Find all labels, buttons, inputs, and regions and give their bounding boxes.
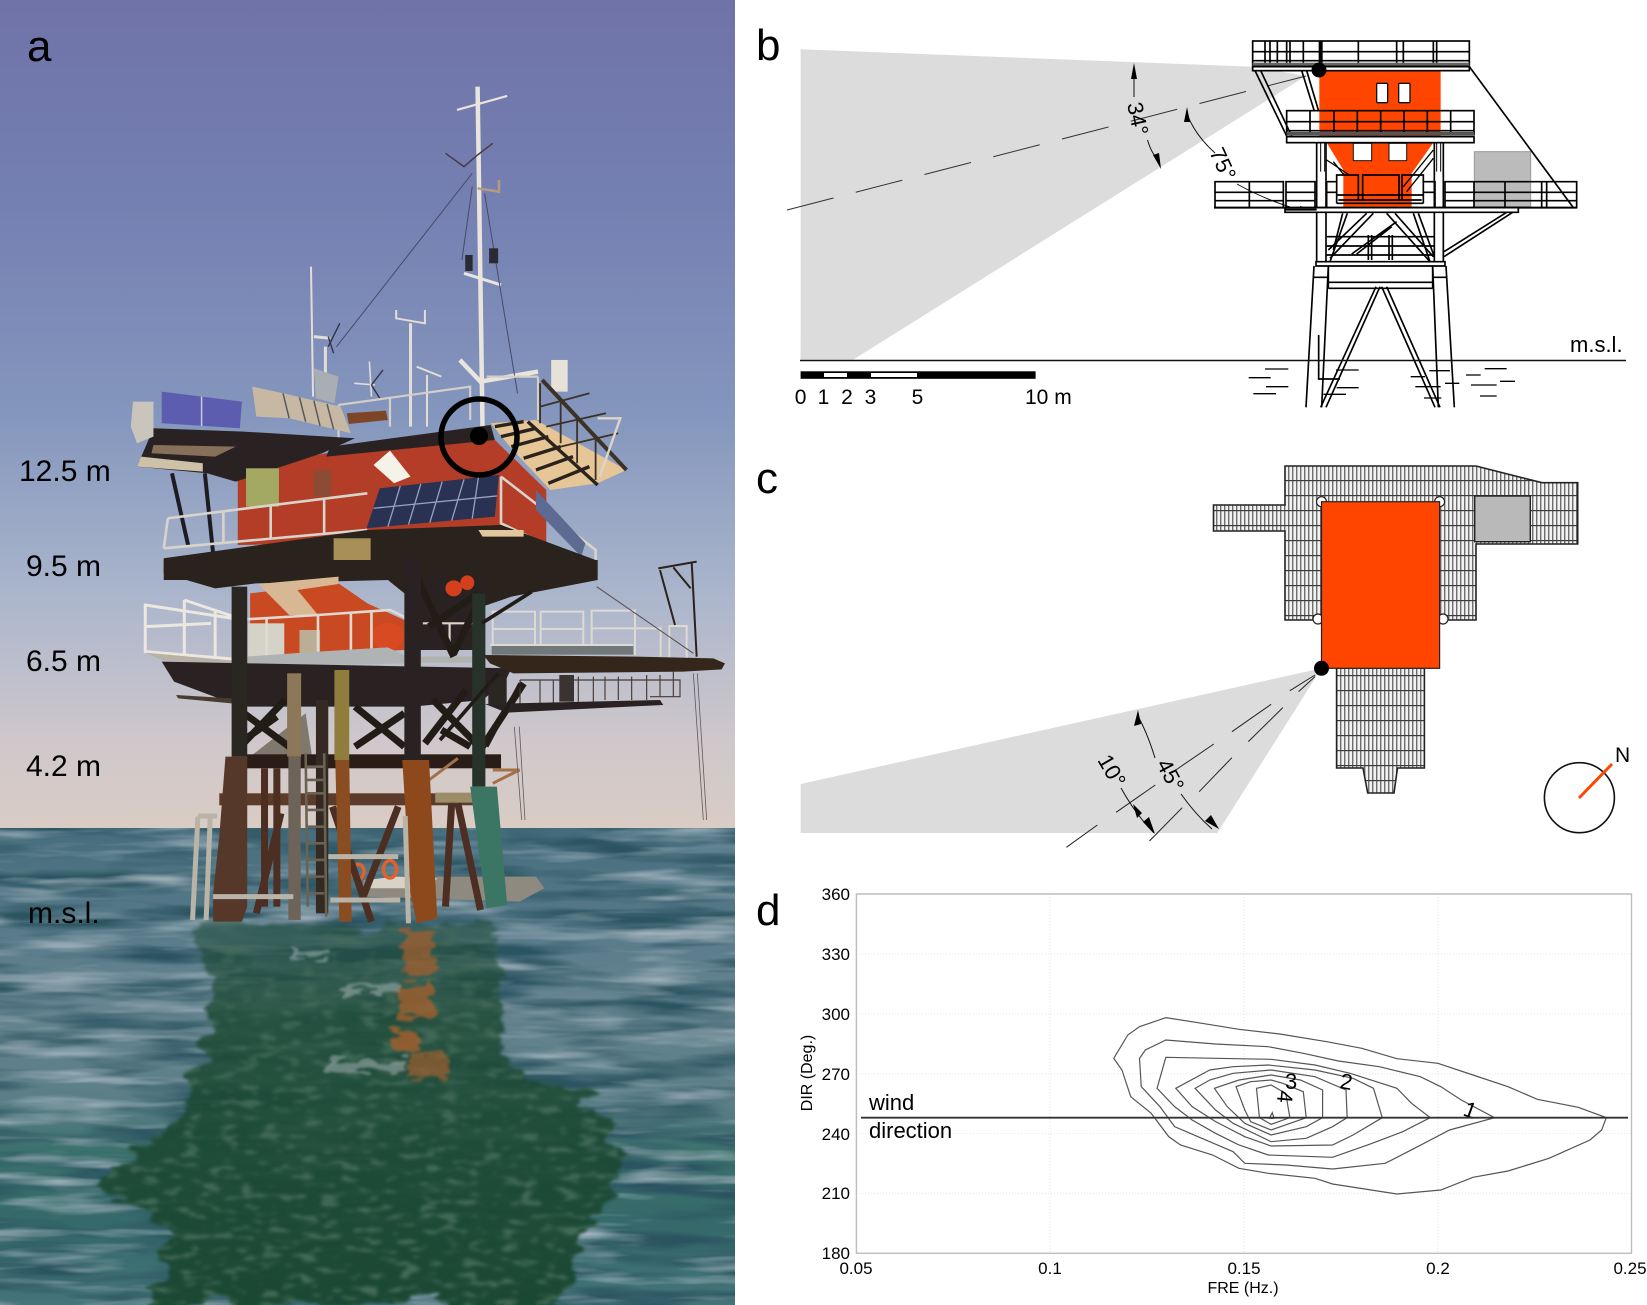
inner leg <box>316 700 328 913</box>
leg 1 <box>213 587 247 922</box>
panel letter d: d <box>756 886 780 935</box>
scale bar: 0 <box>795 386 806 409</box>
main deck <box>162 662 511 707</box>
cross bracing <box>242 577 524 750</box>
centre railing <box>246 610 411 657</box>
left deck <box>137 428 355 482</box>
leg 5 <box>470 593 507 908</box>
34 degree dimension <box>1122 63 1161 169</box>
light solar panels <box>252 387 351 433</box>
mid deck underside <box>164 560 598 607</box>
ladder <box>306 753 326 917</box>
height label: 12.5 m: 12.5 m <box>19 455 111 488</box>
sky <box>0 0 735 829</box>
x axis values: 0.05 <box>839 1259 873 1278</box>
scale bar: 2 <box>841 386 853 409</box>
sensor dot <box>1314 661 1329 676</box>
y axis values <box>822 885 850 1263</box>
x axis values: 0.15 <box>1227 1259 1261 1278</box>
roof railing <box>339 377 538 440</box>
y axis values: 300 <box>822 1005 850 1024</box>
right truss <box>540 380 626 480</box>
lower railing <box>1214 182 1577 208</box>
platform drawing <box>1214 41 1577 407</box>
sea <box>0 828 735 1305</box>
mid deck <box>164 525 596 580</box>
75 degree dimension: 75° <box>1204 144 1241 184</box>
platform upper section <box>131 87 626 580</box>
panel b: side elevation <box>756 21 1626 409</box>
45 degree dimension: 45° <box>1152 755 1189 796</box>
y axis values: 210 <box>822 1184 850 1203</box>
34 degree dimension: 34° <box>1122 100 1153 138</box>
suspended cables <box>514 673 707 820</box>
front solar panel <box>367 475 499 528</box>
hatched deck plan <box>1214 466 1578 620</box>
diagonal braces <box>440 592 532 747</box>
height label: 6.5 m: 6.5 m <box>26 645 101 678</box>
white fender posts <box>193 816 408 923</box>
mast post <box>658 562 697 657</box>
life rings <box>353 861 397 879</box>
lower red wall <box>250 583 404 657</box>
x axis values: 0.2 <box>1426 1259 1450 1278</box>
scale bar: 10 m <box>1025 386 1072 409</box>
sensor dot <box>1312 62 1326 78</box>
scale bar: 1 <box>818 386 829 409</box>
contour label 2: 2 <box>1338 1068 1355 1095</box>
panel letter a: a <box>27 22 52 71</box>
leg 3 <box>334 670 352 922</box>
columns <box>1317 143 1443 208</box>
y axis values: 360 <box>822 885 850 904</box>
lower frame <box>1317 212 1443 262</box>
leg 4 <box>402 560 437 923</box>
height label: mean sea level: m.s.l. <box>28 897 100 930</box>
wind direction label <box>868 1090 952 1143</box>
north compass: N <box>1615 744 1630 767</box>
contour lines <box>1114 1018 1606 1194</box>
x axis values: 0.25 <box>1613 1259 1647 1278</box>
x axis values: 0.1 <box>1038 1259 1062 1278</box>
leg 2 <box>287 673 301 920</box>
gray box <box>1475 496 1530 542</box>
camera field of view <box>801 668 1322 833</box>
y axis values: 270 <box>822 1065 850 1084</box>
75 degree dimension <box>1184 107 1318 212</box>
contour label 3: 3 <box>1285 1069 1297 1094</box>
outrigger deck beam <box>483 655 725 673</box>
left solar panel <box>162 392 242 428</box>
hatched walkway <box>1337 668 1424 793</box>
y axis values: 180 <box>822 1244 850 1263</box>
camera field of view <box>801 49 1306 360</box>
scale bar: 3 <box>865 386 876 409</box>
10 degree dimension <box>1093 750 1155 834</box>
rust struts <box>256 768 480 922</box>
10 degree dimension: 10° <box>1093 750 1131 791</box>
outrigger railings <box>490 611 687 658</box>
sea level line <box>800 360 1626 362</box>
gray box <box>1474 152 1531 207</box>
white dish <box>374 451 411 483</box>
roof band <box>326 425 495 457</box>
cabin railing <box>164 477 596 580</box>
right outrigger deck <box>440 562 725 820</box>
orange cabin <box>1322 502 1440 668</box>
wind direction line <box>861 1117 1628 1119</box>
x axis title: FRE (Hz.) <box>1207 1280 1279 1297</box>
panel a: platform photograph <box>0 0 735 1305</box>
platform lower section <box>145 560 598 923</box>
panel letter b: b <box>756 21 780 70</box>
cylinder sensor <box>551 360 568 392</box>
main mast <box>457 87 538 427</box>
right deck <box>491 420 626 490</box>
x axis values <box>839 1259 1647 1278</box>
tower legs <box>1306 266 1454 407</box>
black ring marker <box>441 399 517 475</box>
y axis values: 240 <box>822 1125 850 1144</box>
orange cabin <box>1319 71 1441 207</box>
rubber boat <box>363 877 544 902</box>
45 degree dimension <box>1134 710 1219 829</box>
top railing <box>1253 41 1469 71</box>
panel letter c: c <box>756 454 778 503</box>
side solar panel <box>536 490 585 557</box>
wind direction label: direction <box>869 1118 952 1143</box>
panel d: directional spectrum chart <box>756 885 1647 1297</box>
horizontal beams <box>246 754 501 768</box>
wave dashes <box>1249 369 1515 398</box>
hanging basket <box>520 672 680 707</box>
centre dashed line <box>787 76 1306 210</box>
scale bar: 5 <box>912 386 923 409</box>
corner columns <box>1313 497 1448 624</box>
contour label 4: 4 <box>1272 1090 1298 1104</box>
dashed sight lines <box>1066 675 1315 847</box>
red cabin wall <box>238 437 546 545</box>
plot frame <box>856 894 1632 1253</box>
plot grid <box>856 894 1631 1253</box>
panel c: plan view <box>756 454 1630 847</box>
height label: 4.2 m: 4.2 m <box>26 750 101 783</box>
stair box <box>250 713 312 757</box>
cabin windows <box>1353 83 1410 161</box>
scale bar <box>795 371 1072 409</box>
m.s.l. label: m.s.l. <box>1570 332 1623 357</box>
middle railing <box>1287 111 1474 143</box>
north compass <box>1544 744 1630 833</box>
y axis values: 330 <box>822 945 850 964</box>
left white railing <box>145 600 244 660</box>
height label: 9.5 m: 9.5 m <box>26 550 101 583</box>
y axis title: DIR (Deg.) <box>799 1035 816 1111</box>
support struts <box>1255 71 1318 136</box>
main deck plank <box>1285 208 1518 212</box>
wind direction label: wind <box>868 1090 914 1115</box>
contour label 1: 1 <box>1460 1096 1480 1124</box>
green sign <box>246 468 279 507</box>
short instrument masts <box>311 267 441 427</box>
central railing <box>1327 150 1433 203</box>
